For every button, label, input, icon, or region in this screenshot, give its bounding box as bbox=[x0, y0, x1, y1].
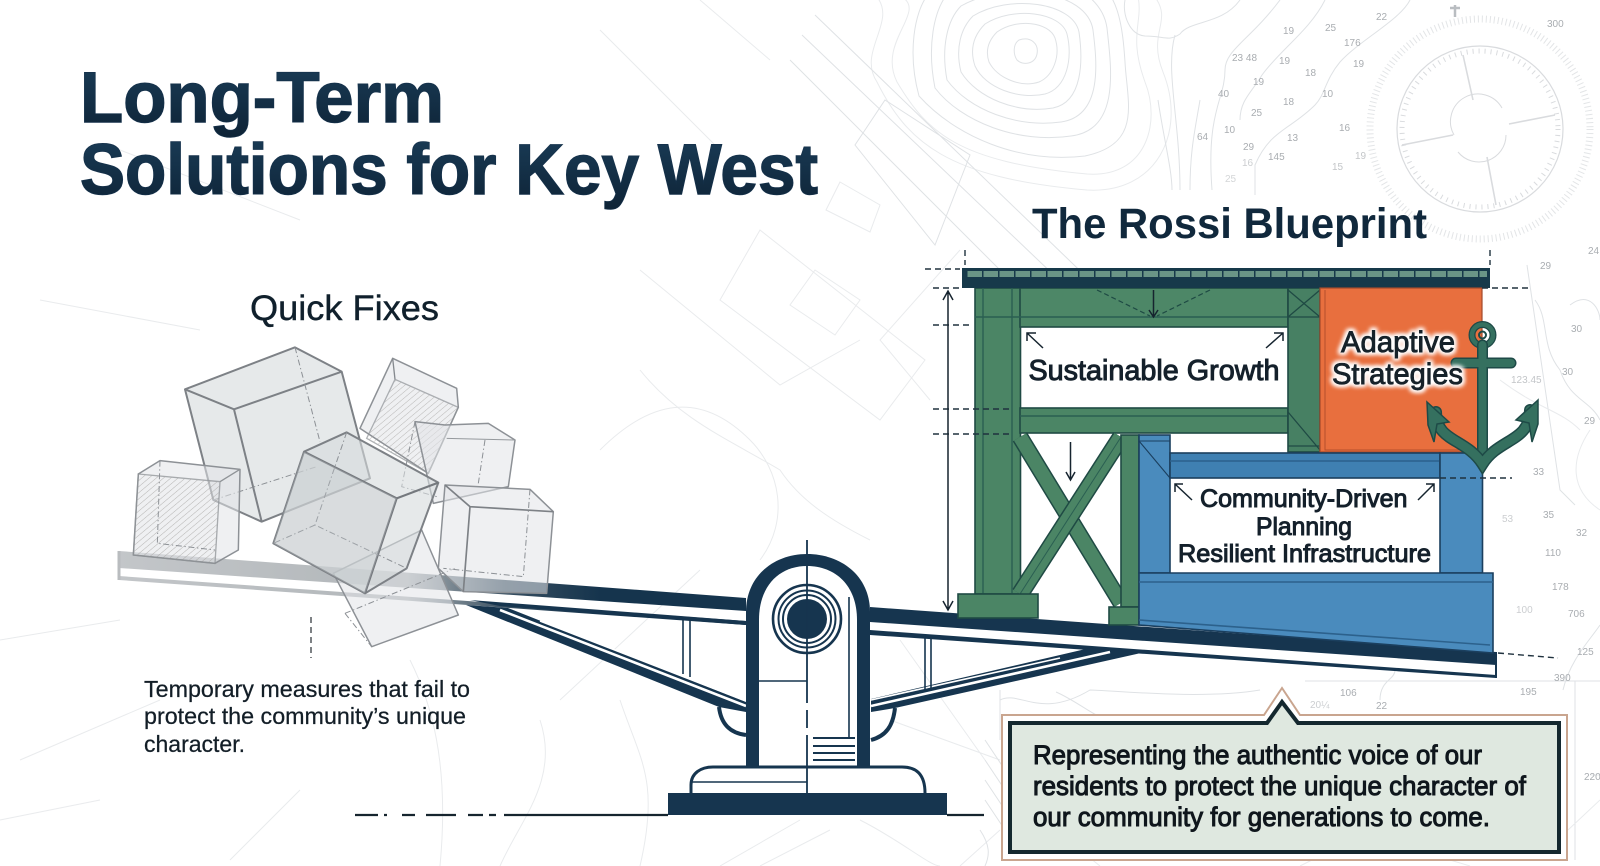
background: nautical depth soundings: 35 bbox=[1543, 510, 1555, 521]
blueprint structure: green frame bbox=[958, 288, 1320, 625]
dashed leader under cubes bbox=[310, 617, 312, 658]
quick fixes: pile of translucent cubes bbox=[133, 347, 553, 647]
title: Long-Term bbox=[80, 59, 444, 138]
arrow: top beam load bbox=[1149, 290, 1158, 317]
strut: left brace bbox=[466, 600, 746, 735]
background: nautical depth soundings: 24 bbox=[1588, 246, 1600, 257]
cube: rear right bbox=[402, 422, 515, 503]
background: nautical depth soundings: 110 bbox=[1545, 548, 1561, 559]
text: callout body: Representing the authentic voice of our bbox=[1033, 740, 1482, 770]
background: nautical depth soundings: 25 bbox=[1225, 174, 1237, 185]
text: quick fixes description: Temporary measures that fail to bbox=[144, 676, 470, 702]
background: nautical depth soundings: 40 bbox=[1218, 89, 1230, 100]
title: Solutions for Key West bbox=[80, 131, 818, 210]
text: Adaptive Strategies bbox=[1332, 326, 1463, 391]
background: nautical depth soundings: 33 bbox=[1533, 467, 1545, 478]
dimension lines bbox=[925, 250, 1558, 658]
background: nautical depth soundings: 23 48 bbox=[1232, 53, 1257, 64]
text: callout body: our community for generations to come. bbox=[1033, 802, 1490, 832]
background: nautical depth soundings: 100 bbox=[1516, 605, 1533, 616]
background: nautical depth soundings: 176 bbox=[1344, 38, 1361, 49]
background: nautical depth soundings: 32 bbox=[1576, 528, 1588, 539]
background: nautical depth soundings: 20¼ bbox=[1310, 699, 1330, 711]
background: nautical depth soundings: 53 bbox=[1502, 514, 1514, 525]
blueprint: roof deck bbox=[962, 268, 1490, 288]
background: nautical depth soundings: 16 bbox=[1242, 158, 1254, 169]
background: nautical depth soundings: 13 bbox=[1287, 133, 1299, 144]
text: quick fixes description bbox=[144, 676, 470, 757]
background: nautical depth soundings: 19 bbox=[1253, 77, 1265, 88]
cube: centre tilted bbox=[273, 432, 438, 593]
cube: right front bbox=[438, 485, 553, 593]
background: nautical depth soundings: 145 bbox=[1268, 152, 1285, 163]
text: Community-Driven Planning Resilient Infrastructure: Community-Driven bbox=[1200, 485, 1408, 513]
background: nautical depth soundings: 10 bbox=[1224, 125, 1236, 136]
panel: blue resilient frame bbox=[1139, 435, 1493, 653]
background: nautical depth soundings: 30 bbox=[1562, 367, 1574, 378]
background: nautical depth soundings: 390 bbox=[1554, 673, 1571, 684]
text: callout body bbox=[1033, 740, 1526, 832]
arrow: height dimension bbox=[943, 291, 953, 610]
background: nautical depth soundings: 195 bbox=[1520, 687, 1537, 698]
background: nautical depth soundings: 19 bbox=[1353, 59, 1365, 70]
icon: anchor bbox=[1427, 324, 1538, 464]
background: nautical depth soundings: 10 bbox=[1322, 89, 1334, 100]
background: nautical depth soundings: 25 bbox=[1325, 23, 1337, 34]
text: Community-Driven Planning Resilient Infrastructure: Planning bbox=[1256, 513, 1352, 541]
text: Adaptive Strategies: Adaptive bbox=[1341, 326, 1455, 359]
background: nautical depth soundings: 106 bbox=[1340, 688, 1357, 699]
background: nautical depth soundings: 29 bbox=[1540, 261, 1552, 272]
background: nautical depth soundings: 123.45 bbox=[1511, 375, 1542, 386]
text: callout body: residents to protect the unique character of bbox=[1033, 771, 1526, 801]
strut: right brace bbox=[871, 638, 1141, 740]
text: Community-Driven Planning Resilient Infrastructure bbox=[1178, 485, 1431, 568]
background: nautical depth soundings: 19 bbox=[1279, 56, 1291, 67]
background: nautical depth soundings: 300 bbox=[1547, 19, 1564, 30]
arrows: panel corner marks bbox=[1027, 333, 1434, 500]
background: nautical depth soundings: 29 bbox=[1243, 142, 1255, 153]
background: nautical depth soundings: 178 bbox=[1552, 582, 1569, 593]
heading: The Rossi Blueprint: The Rossi Blueprint bbox=[1032, 200, 1427, 248]
background: nautical depth soundings: 30 bbox=[1571, 324, 1583, 335]
background: nautical depth soundings: 25 bbox=[1251, 108, 1263, 119]
panel: orange adaptive strategies bbox=[1320, 288, 1482, 452]
text: Adaptive Strategies: Strategies bbox=[1332, 358, 1463, 391]
background: nautical depth soundings: 125 bbox=[1577, 647, 1594, 658]
background: nautical depth soundings: 16 bbox=[1339, 123, 1351, 134]
background: nautical depth soundings: 18 bbox=[1305, 68, 1317, 79]
fulcrum pivot bbox=[668, 540, 947, 815]
text: Sustainable Growth: Sustainable Growth bbox=[1028, 355, 1280, 387]
background: nautical depth soundings: 29 bbox=[1584, 416, 1596, 427]
arrow: load down bbox=[1066, 442, 1075, 480]
background: nautical depth soundings: 18 bbox=[1283, 97, 1295, 108]
cube: left hatched bbox=[133, 461, 240, 563]
seesaw beam: right side bbox=[870, 607, 1496, 678]
background: nautical depth soundings: 706 bbox=[1568, 609, 1585, 620]
background: nautical depth soundings: 15 bbox=[1332, 162, 1344, 173]
background: nautical depth soundings: 22 bbox=[1376, 12, 1388, 23]
text: quick fixes description: protect the community’s unique bbox=[144, 703, 466, 729]
callout: Rossi mission statement bbox=[1002, 688, 1567, 860]
heading: Quick Fixes: Quick Fixes bbox=[250, 289, 439, 328]
background: nautical depth soundings: 22 bbox=[1376, 701, 1388, 712]
background: nautical depth soundings: 19 bbox=[1355, 151, 1367, 162]
title bbox=[80, 59, 818, 210]
text: Community-Driven Planning Resilient Infrastructure: Resilient Infrastructure bbox=[1178, 540, 1431, 568]
text: quick fixes description: character. bbox=[144, 731, 245, 757]
background: nautical depth soundings bbox=[1197, 12, 1600, 783]
background: compass rose bbox=[1370, 5, 1590, 239]
background: nautical depth soundings: 64 bbox=[1197, 132, 1209, 143]
cube: large back bbox=[185, 347, 370, 522]
ground line bbox=[355, 814, 984, 816]
cube: lower fallen bbox=[333, 530, 458, 647]
seesaw beam: left side bbox=[119, 551, 746, 625]
background: nautical depth soundings: 19 bbox=[1283, 26, 1295, 37]
cube: hatched back bbox=[360, 358, 458, 473]
